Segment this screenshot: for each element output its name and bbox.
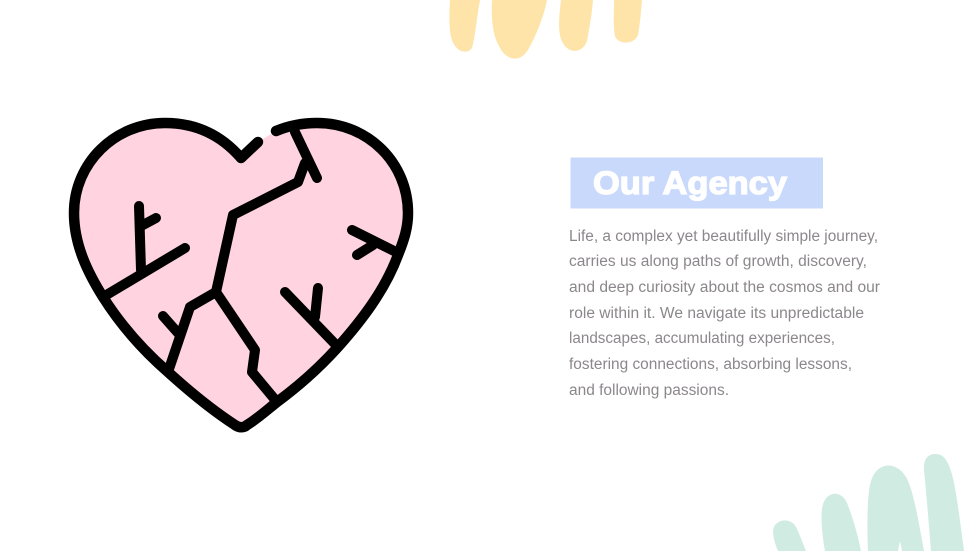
cracks bbox=[103, 132, 398, 402]
body text: and following passions. bbox=[569, 382, 729, 399]
icon: broken heart bbox=[74, 123, 408, 427]
body text: carries us along paths of growth, discovery, bbox=[569, 253, 867, 270]
body text: fostering connections, absorbing lessons, bbox=[569, 356, 852, 373]
body text: and deep curiosity about the cosmos and our bbox=[569, 279, 880, 296]
title banner: Our Agency bbox=[593, 165, 787, 201]
body text: landscapes, accumulating experiences, bbox=[569, 330, 835, 347]
body text: Life, a complex yet beautifully simple journey, bbox=[569, 228, 878, 245]
body text bbox=[569, 228, 880, 399]
body text: role within it. We navigate its unpredictable bbox=[569, 305, 864, 322]
decorative green brush strokes bbox=[773, 454, 964, 551]
decorative yellow brush strokes bbox=[449, 0, 642, 59]
heart outline bbox=[74, 123, 408, 427]
heart fill bbox=[74, 123, 408, 427]
title banner bbox=[570, 158, 823, 208]
